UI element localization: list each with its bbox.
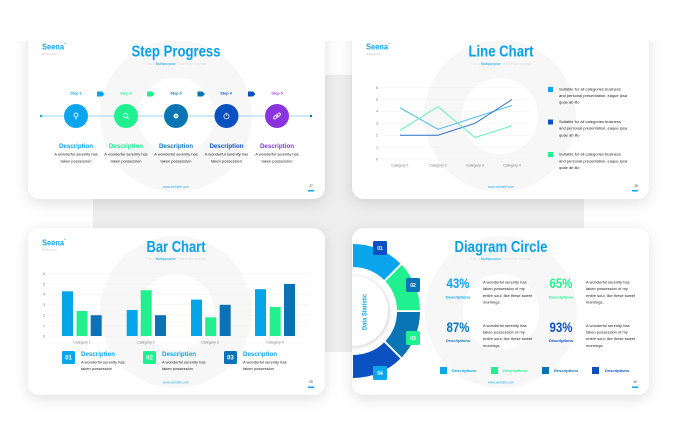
statistics: Descriptions [446, 295, 471, 300]
diagram legend: Descriptions [554, 368, 579, 373]
statistics: taken possession of my [586, 330, 628, 334]
diagram badges: 02 [410, 283, 416, 289]
bar chart graph: 5 [43, 282, 45, 286]
step descriptions: taken possession [111, 158, 141, 164]
line chart graph: 5 [376, 98, 378, 102]
bar chart heading: Bar Chart [146, 239, 206, 256]
line chart graph: Category 3 [466, 164, 484, 168]
step progress timeline: Step 3 [170, 92, 182, 96]
bar chart graph: Category 4 [266, 340, 284, 344]
panel: diagram circle: 40 [633, 380, 637, 384]
step descriptions: Description [209, 143, 244, 150]
step descriptions: A wonderful serenity has [154, 152, 198, 156]
bar chart descriptions: A wonderful serenity has [81, 359, 125, 364]
bar chart descriptions: Description [81, 351, 115, 358]
diagram badges: 04 [377, 371, 383, 377]
diagram legend: Descriptions [503, 368, 528, 373]
line chart graph: 0 [376, 157, 378, 161]
heading: line chart: This is Multipurpose PowerPoint template [471, 62, 531, 66]
statistics: mornings. [483, 300, 501, 304]
panel: bar chart: 39 [309, 380, 313, 384]
bar chart graph: 6 [43, 272, 45, 276]
step descriptions: A wonderful serenity has [255, 152, 299, 156]
diagram legend: Descriptions [452, 368, 477, 373]
statistics: A wonderful serenity has [483, 323, 527, 328]
bar chart graph: Category 3 [201, 340, 219, 344]
heading: line chart [366, 42, 534, 66]
donut label: Data Statistic [362, 294, 368, 330]
heading: step progress [42, 42, 221, 66]
line chart legend: and personal presentation, eaque ipsa [559, 93, 628, 98]
bar chart graph: 1 [43, 324, 45, 328]
bar chart descriptions: A wonderful serenity has [243, 359, 287, 364]
statistics: entire soul, like these sweet [483, 293, 533, 298]
line chart legend: and personal presentation, eaque ipsa [559, 126, 628, 131]
panel: line chart: 38 [634, 184, 638, 188]
statistics: 87% [446, 320, 470, 335]
panel: diagram circle [318, 228, 649, 395]
bar chart heading [42, 238, 206, 261]
statistics: 65% [550, 276, 572, 291]
statistics: entire soul, like these sweet [483, 336, 533, 341]
statistics: taken possession of my [586, 286, 628, 291]
panel: step progress [28, 20, 325, 199]
bar chart graph: 2 [43, 314, 45, 318]
statistics: taken possession of my [483, 286, 525, 291]
line chart legend: quae ab illo [559, 100, 580, 105]
donut diagram [352, 244, 420, 378]
statistics: A wonderful serenity has [586, 280, 630, 284]
line chart legend: quae ab illo [559, 165, 580, 170]
bar chart descriptions: Description [162, 351, 196, 358]
statistics: mornings. [586, 300, 604, 304]
diagram legend: Descriptions [605, 368, 630, 373]
statistics: Descriptions [549, 338, 574, 343]
bar chart graph: Category 2 [137, 340, 155, 344]
step descriptions: A wonderful serenity has [54, 152, 98, 156]
bar chart descriptions [62, 351, 287, 371]
step progress timeline: Step 2 [120, 92, 132, 96]
statistics: A wonderful serenity has [483, 280, 527, 284]
line chart graph: Category 4 [503, 164, 521, 168]
bar chart descriptions: taken possession [81, 366, 112, 371]
step descriptions: taken possession [161, 158, 191, 164]
line chart legend: quae ab illo [559, 132, 580, 137]
bar chart descriptions: taken possession [243, 366, 274, 371]
line chart graph: 3 [376, 122, 378, 126]
diagram heading: Diagram Circle [454, 239, 548, 256]
heading: line chart: Line Chart [468, 44, 534, 61]
panel: line chart [352, 20, 649, 199]
line chart graph: 1 [376, 145, 378, 149]
bar chart descriptions: taken possession [162, 366, 193, 371]
panel: step progress: 37 [309, 184, 313, 188]
panel: bar chart: www.website.com [163, 380, 189, 384]
statistics: 43% [446, 276, 470, 291]
top white mask [0, 0, 680, 41]
step descriptions: taken possession [262, 158, 292, 164]
bar chart descriptions: 01 [65, 356, 72, 362]
line chart graph: 6 [376, 86, 378, 90]
statistics: entire soul, like these sweet [586, 336, 636, 341]
step descriptions: A wonderful serenity has [205, 152, 248, 156]
bar chart heading: Seena [42, 238, 64, 248]
heading: step progress: Seena [42, 42, 64, 52]
statistics: A wonderful serenity has [586, 323, 630, 328]
heading: line chart: Multipurpose [366, 52, 381, 56]
line chart legend [548, 86, 628, 170]
statistics: mornings. [483, 343, 501, 348]
bar chart descriptions: 02 [146, 356, 153, 362]
step descriptions: taken possession [61, 158, 91, 164]
step descriptions: Description [159, 143, 193, 150]
background panel [93, 75, 584, 352]
step descriptions: Description [59, 143, 93, 150]
line chart legend: Suitable for all categories business [559, 152, 621, 157]
statistics: taken possession of my [483, 330, 525, 334]
line chart legend: Suitable for all categories business [559, 86, 621, 91]
statistics [446, 276, 636, 348]
statistics: entire soul, like these sweet [586, 293, 636, 298]
bar chart descriptions: Description [243, 351, 277, 358]
diagram badges: 01 [377, 246, 383, 252]
statistics: Descriptions [549, 295, 574, 300]
heading: step progress: Multipurpose [42, 52, 57, 56]
panel: diagram circle: www.website.com [488, 380, 514, 384]
bar chart heading: This is Multipurpose PowerPoint template [146, 257, 206, 261]
bar chart heading: Multipurpose [42, 248, 57, 252]
step progress timeline: Step 5 [271, 92, 283, 96]
line chart legend: Suitable for all categories business [559, 119, 621, 124]
line chart graph: Category 1 [391, 164, 409, 168]
bar chart graph [43, 272, 308, 344]
bar chart descriptions: 03 [227, 356, 234, 362]
diagram badges: 03 [410, 336, 416, 342]
diagram legend [440, 367, 630, 374]
step progress timeline: Step 1 [70, 92, 82, 96]
line chart graph: Category 2 [429, 164, 447, 168]
bar chart graph: Category 1 [73, 340, 91, 344]
bar chart graph: 4 [43, 293, 45, 297]
line chart graph: 2 [376, 134, 378, 138]
line chart legend: and personal presentation, eaque ipsa [559, 158, 628, 163]
statistics: 93% [550, 320, 572, 335]
panel: line chart: www.website.com [488, 185, 514, 189]
step descriptions: Description [109, 143, 143, 150]
line chart graph [376, 86, 530, 168]
step descriptions [54, 143, 299, 164]
line chart graph: 4 [376, 110, 378, 114]
diagram heading [454, 239, 548, 261]
panel: step progress: www.website.com [163, 185, 189, 189]
panel: bar chart [28, 228, 325, 395]
statistics: mornings. [586, 343, 604, 348]
step descriptions: taken possession [211, 158, 242, 164]
heading: step progress: This is Multipurpose PowerPoint template [146, 62, 206, 66]
heading: line chart: Seena [366, 42, 388, 52]
step progress timeline: Step 4 [220, 92, 233, 96]
diagram badges [373, 241, 420, 380]
heading: step progress: Step Progress [132, 44, 221, 61]
step descriptions: A wonderful serenity has [104, 152, 148, 156]
step progress timeline [40, 92, 312, 128]
bar chart graph: 3 [43, 303, 45, 307]
statistics: Descriptions [446, 338, 471, 343]
bar chart descriptions: A wonderful serenity has [162, 359, 206, 364]
bar chart graph: 0 [43, 334, 45, 338]
step descriptions: Description [260, 143, 294, 150]
diagram heading: This is Multipurpose PowerPoint template [471, 257, 531, 261]
